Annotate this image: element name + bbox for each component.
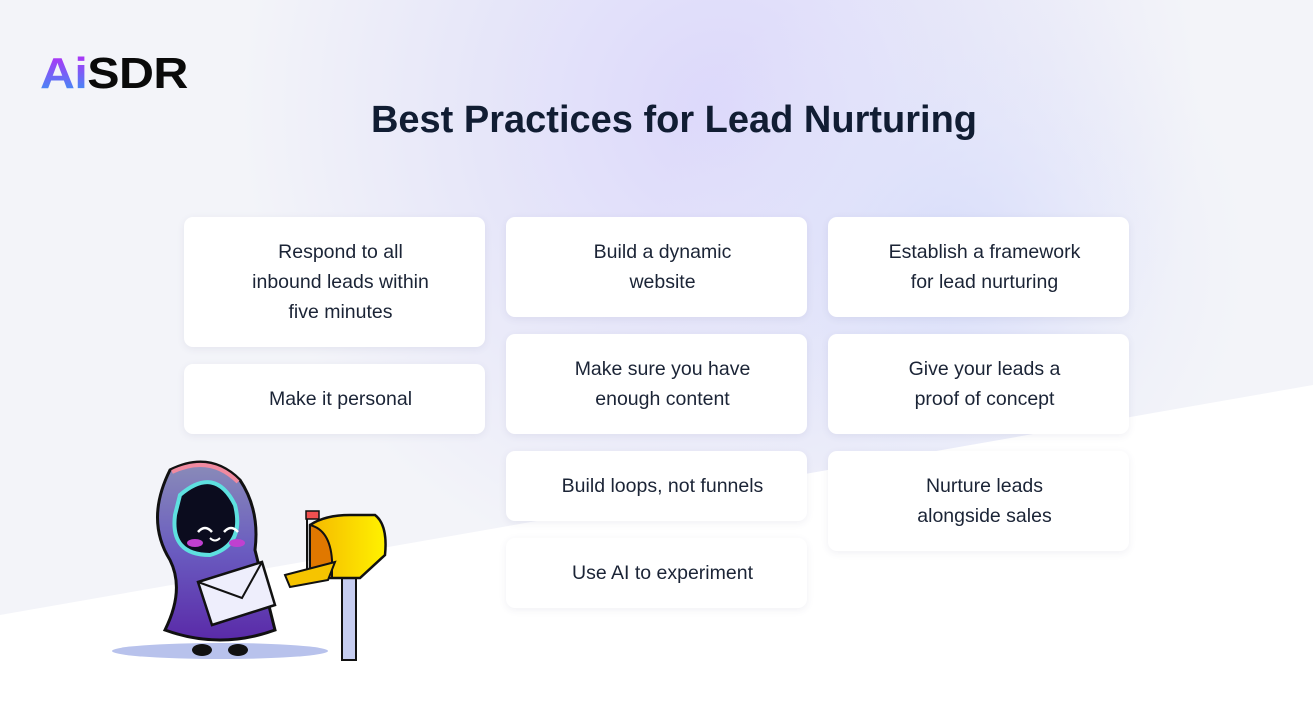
card: respond: Respond to all	[278, 241, 403, 263]
card: framework	[828, 217, 1129, 317]
card: content: Make sure you have	[575, 358, 750, 380]
card: framework: for lead nurturing	[911, 271, 1058, 293]
logo: AiSDR	[40, 49, 188, 98]
card: personal	[184, 364, 485, 434]
card: respond	[184, 217, 485, 347]
title: Best Practices for Lead Nurturing	[371, 99, 977, 141]
card: AI	[506, 538, 807, 608]
card: AI: Use AI to experiment	[572, 562, 753, 584]
card: content: enough content	[595, 388, 730, 410]
card: framework: Establish a framework	[889, 241, 1080, 263]
card: proof	[828, 334, 1129, 434]
card: sales: alongside sales	[917, 505, 1052, 527]
card: loops	[506, 451, 807, 521]
illustration: mascot with mailbox	[112, 460, 387, 661]
card: website: website	[629, 271, 696, 293]
card: proof: Give your leads a	[909, 358, 1060, 380]
card: sales	[828, 451, 1129, 551]
card: respond: inbound leads within	[252, 271, 429, 293]
card: proof: proof of concept	[915, 388, 1054, 410]
card: website: Build a dynamic	[594, 241, 731, 263]
card: sales: Nurture leads	[926, 475, 1043, 497]
card: respond: five minutes	[288, 301, 393, 323]
card: loops: Build loops, not funnels	[562, 475, 763, 497]
card: personal: Make it personal	[269, 388, 412, 410]
card: content	[506, 334, 807, 434]
card: website	[506, 217, 807, 317]
